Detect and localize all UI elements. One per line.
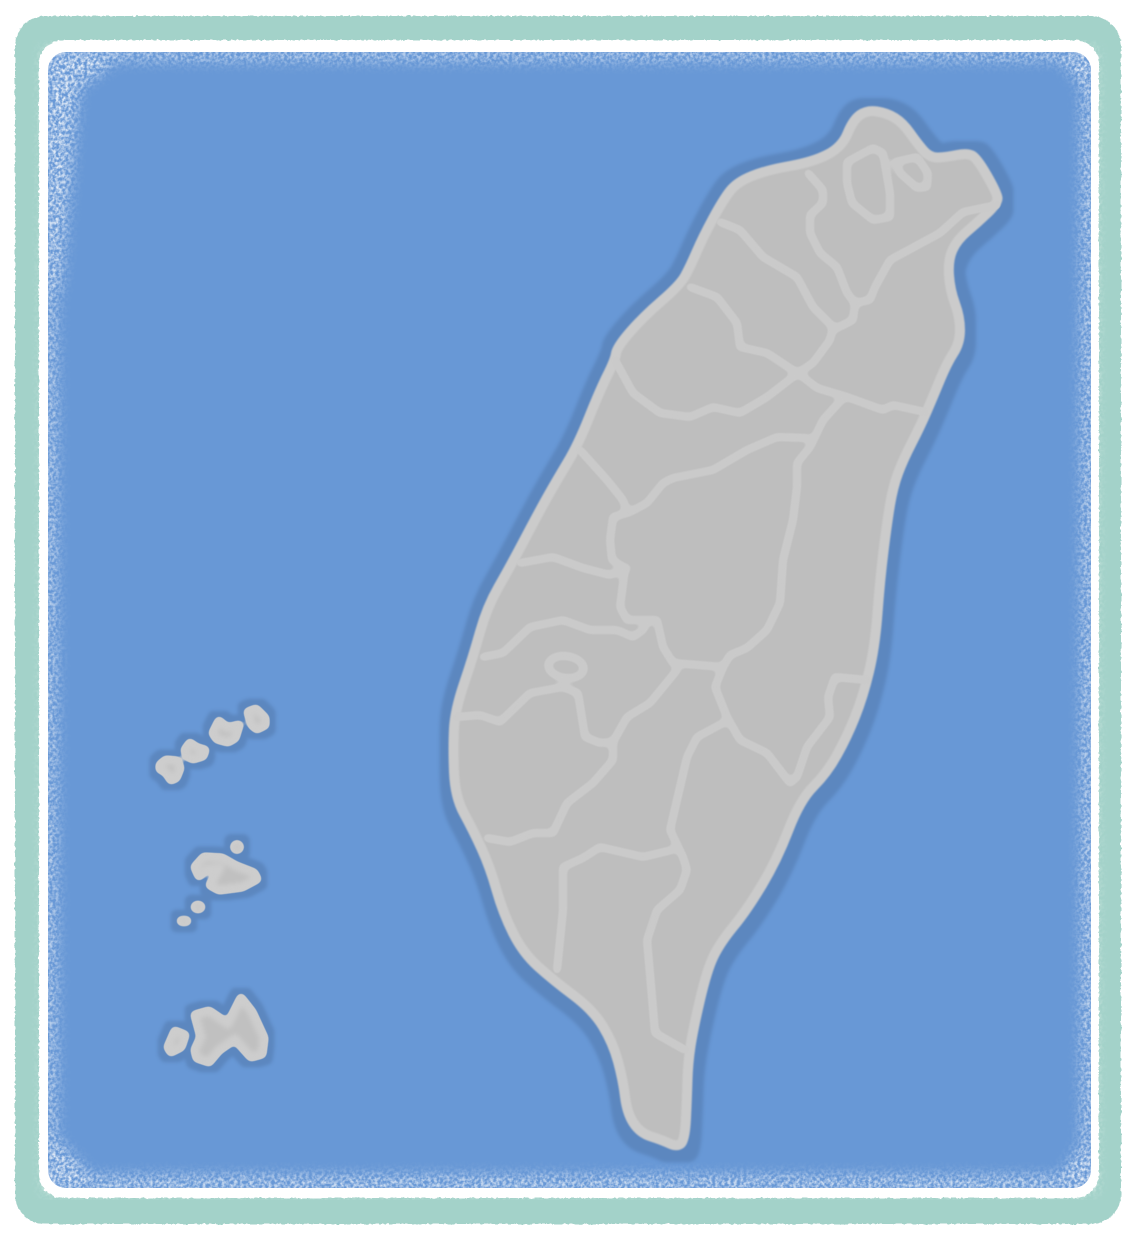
boundary: Nantou north — [610, 437, 807, 667]
boundary: Yilan south — [798, 373, 925, 412]
boundary: Miaoli — [615, 360, 798, 417]
island outline with coastal shadow — [454, 111, 998, 1145]
county boundaries — [457, 148, 997, 1050]
islands: southern group — [168, 998, 264, 1062]
map: Taiwan main island — [454, 111, 998, 1145]
boundary: Taichung south — [580, 450, 627, 512]
boundary: Chiayi south — [457, 670, 677, 743]
boundary: Chiayi city — [547, 654, 585, 680]
boundary: Taipei city — [847, 148, 890, 220]
islands: middle group — [181, 844, 257, 922]
boundary: Kaohsiung east — [647, 722, 725, 1050]
boundary: Changhua south — [520, 557, 627, 575]
boundary: Taoyuan — [720, 222, 833, 373]
boundary: Hualien west — [715, 398, 867, 783]
boundary: Tainan south — [487, 742, 613, 842]
boundary: New Taipei west — [808, 173, 855, 328]
boundary: Keelung — [895, 157, 928, 188]
map: outlying islands — [160, 709, 265, 1062]
islands: northern group — [160, 709, 265, 780]
boundary: Kaohsiung south — [557, 847, 672, 970]
boundary: New Taipei south-east — [855, 205, 997, 303]
boundary: Yunlin south — [483, 620, 647, 657]
boundary: Hsinchu — [690, 287, 797, 373]
